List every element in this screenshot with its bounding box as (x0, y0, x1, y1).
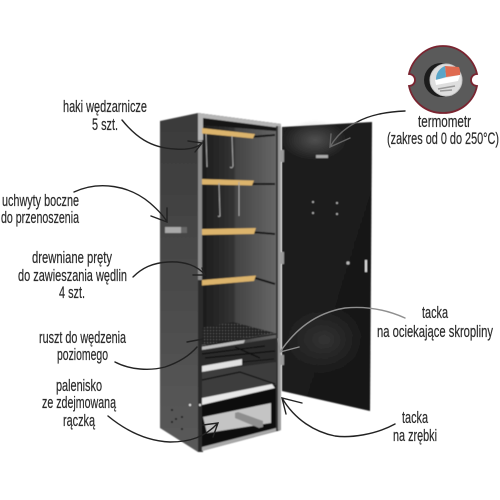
door hinges (280, 150, 284, 365)
label: wood chip tray: na zrębki (393, 426, 437, 445)
label: wooden rods: do zawieszania wędlin (18, 266, 127, 285)
label: firebox: ze zdejmowaną (42, 393, 116, 412)
callout: firebox (42, 376, 218, 442)
label: wood chip tray (393, 408, 437, 445)
arrow: wood chip tray (282, 398, 395, 437)
wood chip tray (202, 362, 276, 405)
horizontal smoking grate (202, 322, 276, 350)
arrow: hooks (122, 120, 202, 152)
smoker cabinet (160, 113, 281, 452)
arrow: wooden rods (133, 262, 205, 277)
thermometer bolt (316, 155, 328, 158)
label: drip tray: tacka (422, 303, 448, 322)
callout: wood chip tray (282, 398, 437, 445)
label: grate: ruszt do wędzenia (39, 328, 126, 347)
label: firebox (42, 376, 116, 430)
callout: thermometer (330, 111, 499, 148)
label: hooks (63, 97, 147, 134)
door latch (365, 260, 367, 272)
callout: side handles (1, 186, 167, 227)
smoking hooks (206, 134, 239, 216)
label: hooks: 5 szt. (92, 115, 118, 134)
arrow: thermometer (357, 111, 405, 122)
arrow tip inside door (330, 122, 357, 147)
arrow: drip tray (278, 307, 405, 352)
arrow: side handles (74, 186, 167, 222)
arrow: grate (115, 339, 203, 369)
side carrying handle (165, 227, 187, 233)
label: firebox: rączką (63, 411, 95, 430)
shelf rails (250, 135, 275, 284)
label: wooden rods: drewniane pręty (32, 248, 112, 267)
callout: grate (39, 328, 203, 369)
thermometer detail (409, 46, 477, 113)
label: side handles: uchwyty boczne (2, 191, 79, 210)
cabinet interior (198, 113, 281, 452)
thermometer gauge (430, 64, 462, 96)
side vent holes (171, 409, 183, 430)
callout: hooks (63, 97, 202, 152)
label: side handles (1, 191, 79, 227)
label: hooks: haki wędzarnicze (63, 97, 147, 116)
callout: drip tray (278, 303, 493, 352)
label: drip tray (377, 303, 493, 341)
arrow: firebox (108, 416, 218, 442)
label: grate: poziomego (57, 345, 108, 364)
label: wooden rods: 4 szt. (59, 283, 85, 302)
wooden rods (202, 128, 256, 286)
cabinet side panel (160, 113, 198, 452)
callout: wooden rods (18, 248, 205, 302)
label: wood chip tray: tacka (402, 408, 428, 427)
label: wooden rods (18, 248, 127, 302)
door rivets (312, 201, 350, 265)
label: thermometer (387, 112, 499, 148)
thermometer badge (409, 46, 477, 113)
label: grate (39, 328, 126, 364)
label: thermometer: termometr (418, 112, 471, 131)
label: firebox: palenisko (56, 376, 102, 395)
firebox with removable handle (189, 388, 276, 451)
label: side handles: do przenoszenia (1, 208, 79, 227)
drip tray (202, 338, 276, 372)
open door (280, 120, 372, 411)
